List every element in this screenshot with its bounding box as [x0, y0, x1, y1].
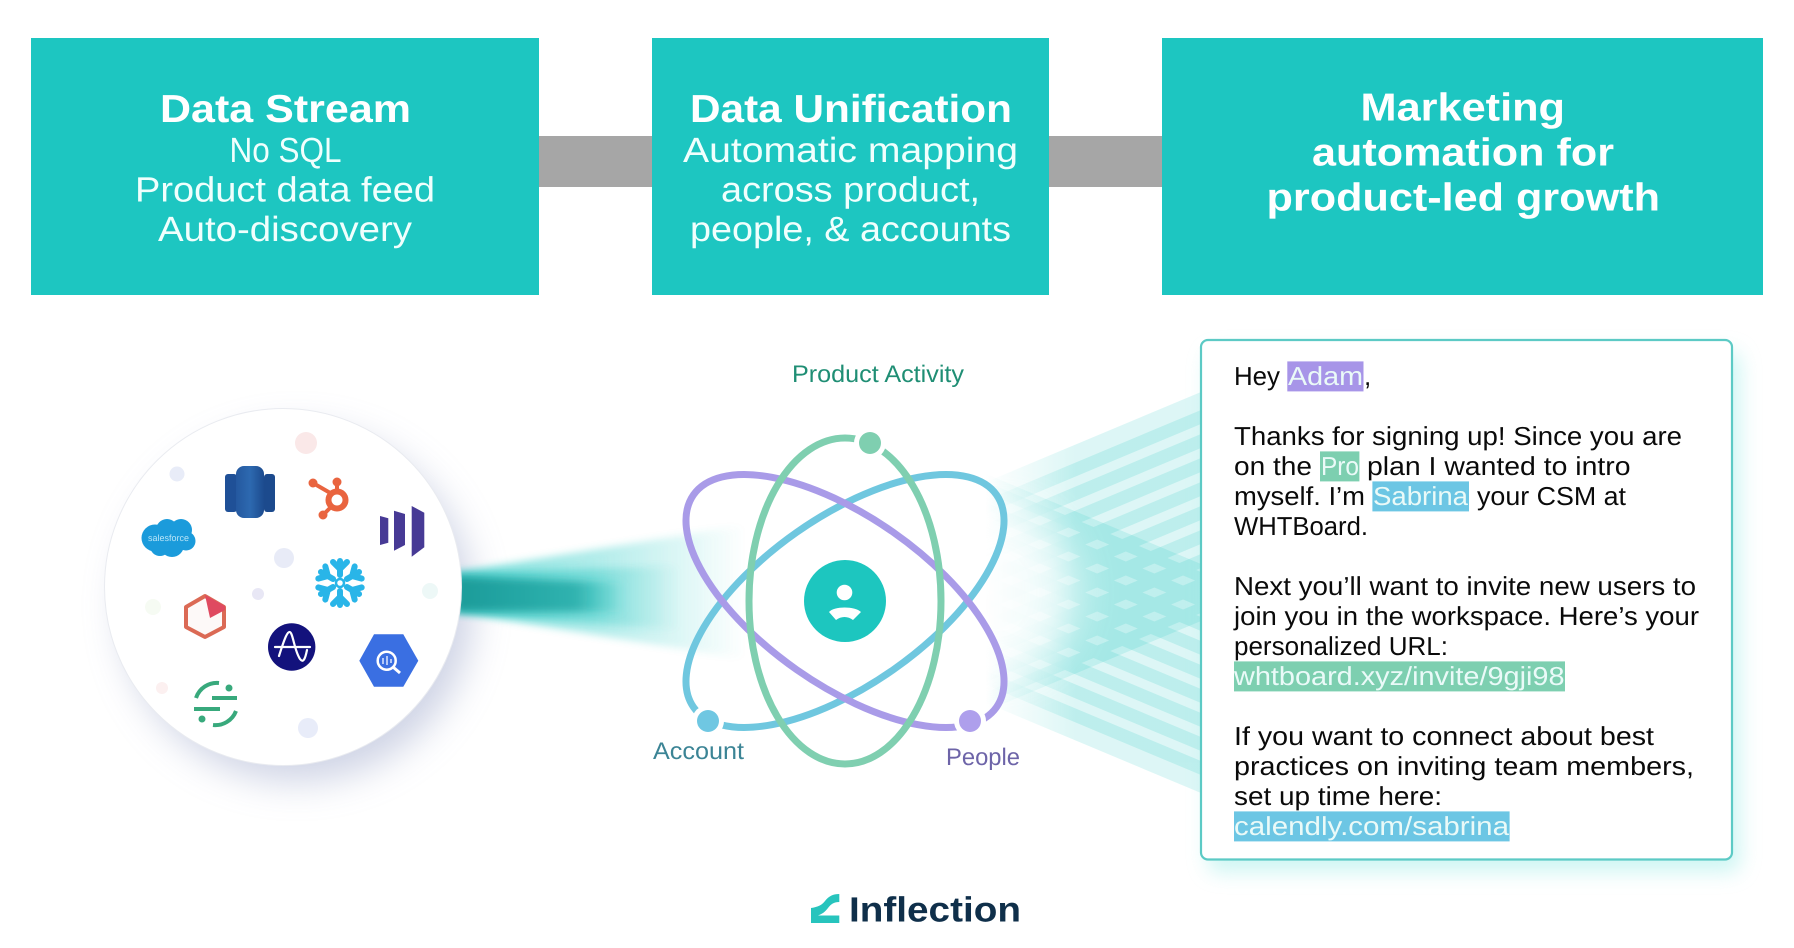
icon: marketo bars: [380, 506, 424, 557]
panel: Data Stream: [31, 38, 539, 295]
text: paragraph 2: personalized URL:: [1234, 631, 1448, 661]
text: paragraph 2: Next you’ll want to invite new users to: [1234, 571, 1696, 601]
heading: product-led growth: product-led growth: [1266, 176, 1660, 220]
text: Automatic mapping: Automatic mapping: [683, 131, 1018, 170]
shadow: integrations circle: [121, 430, 473, 782]
icon: bigquery: [359, 634, 418, 687]
panel: email card: [1201, 340, 1740, 872]
text: paragraph 3: If you want to connect about best: [1234, 721, 1655, 751]
text: paragraph 3: [1234, 721, 1694, 841]
text: paragraph 1: Thanks for signing up! Since you are: [1234, 421, 1682, 451]
orbit: blue account: [645, 426, 1045, 776]
node: people: [954, 705, 986, 737]
text: paragraph 1: myself. I’m: [1234, 481, 1365, 511]
icon: amplitude: [268, 623, 315, 671]
icon: hubspot: [310, 480, 346, 518]
icon: redshift: [225, 466, 275, 518]
text: people and accounts: people, & accounts: [690, 210, 1011, 249]
logo: Inflection: Inflection: [849, 890, 1021, 930]
panel: Data Unification: [652, 38, 1049, 295]
text: paragraph 1: Sabrina: [1373, 481, 1469, 511]
text: paragraph 1: WHTBoard.: [1234, 511, 1368, 541]
text: paragraph 2: join you in the workspace. Here’s your: [1233, 601, 1699, 631]
node: account: [692, 705, 724, 737]
orbit: green product activity: [749, 438, 941, 764]
text: greeting: ,: [1364, 361, 1371, 391]
heading: Data Stream: Data Stream: [160, 88, 411, 131]
heading: Data Unification: Data Unification: [690, 88, 1012, 131]
node: product activity: [854, 427, 886, 459]
label: People: People: [946, 744, 1020, 771]
text: paragraph 3: practices on inviting team members,: [1234, 751, 1694, 781]
orbit: purple people: [645, 426, 1045, 776]
connector: unification to marketing: [1049, 136, 1162, 187]
heading: Marketing: Marketing: [1360, 86, 1565, 130]
text: paragraph 3: calendly.com/sabrina: [1234, 811, 1510, 841]
beam: data stream into atom: [456, 525, 745, 659]
text: across product: across product,: [721, 170, 980, 210]
text: Product data feed: Product data feed: [135, 170, 435, 210]
diagram: atom: [645, 426, 1045, 776]
panel: Marketing automation: [1162, 38, 1763, 295]
text: greeting: [1234, 361, 1371, 391]
heading: automation for: automation for: [1312, 132, 1614, 174]
text: paragraph 1: plan I wanted to intro: [1367, 451, 1630, 481]
label: Product Activity: Product Activity: [792, 361, 964, 388]
text: paragraph 1: on the: [1234, 451, 1312, 481]
icon: red hexagon: [186, 595, 225, 637]
text: greeting: Hey: [1234, 361, 1280, 391]
text: Auto-discovery: Auto-discovery: [158, 210, 413, 249]
icon: sentry green: [194, 683, 237, 725]
icon: snowflake: [317, 561, 363, 605]
beam: light fan from atom to email: [992, 392, 1200, 792]
text: paragraph 1: Pro: [1321, 451, 1359, 481]
decorative dots: [145, 432, 438, 738]
text: paragraph 1: your CSM at: [1477, 481, 1627, 511]
text: paragraph 3: set up time here:: [1234, 781, 1442, 811]
label: Account: Account: [653, 738, 744, 765]
text: paragraph 2: [1233, 571, 1699, 691]
icon: logo mark: [811, 894, 839, 923]
text: paragraph 1: [1234, 421, 1682, 541]
panel: integrations circle: [104, 408, 462, 766]
icon: salesforce cloud: [142, 519, 196, 557]
icon: central person: [804, 560, 886, 642]
text: paragraph 2: whtboard.xyz/invite/9gji98: [1233, 661, 1564, 691]
connector: stream to unification: [539, 136, 652, 187]
text: greeting: Adam: [1288, 361, 1363, 391]
icon: salesforce cloud: salesforce: [148, 533, 189, 543]
text: No SQL: No SQL: [230, 131, 342, 170]
